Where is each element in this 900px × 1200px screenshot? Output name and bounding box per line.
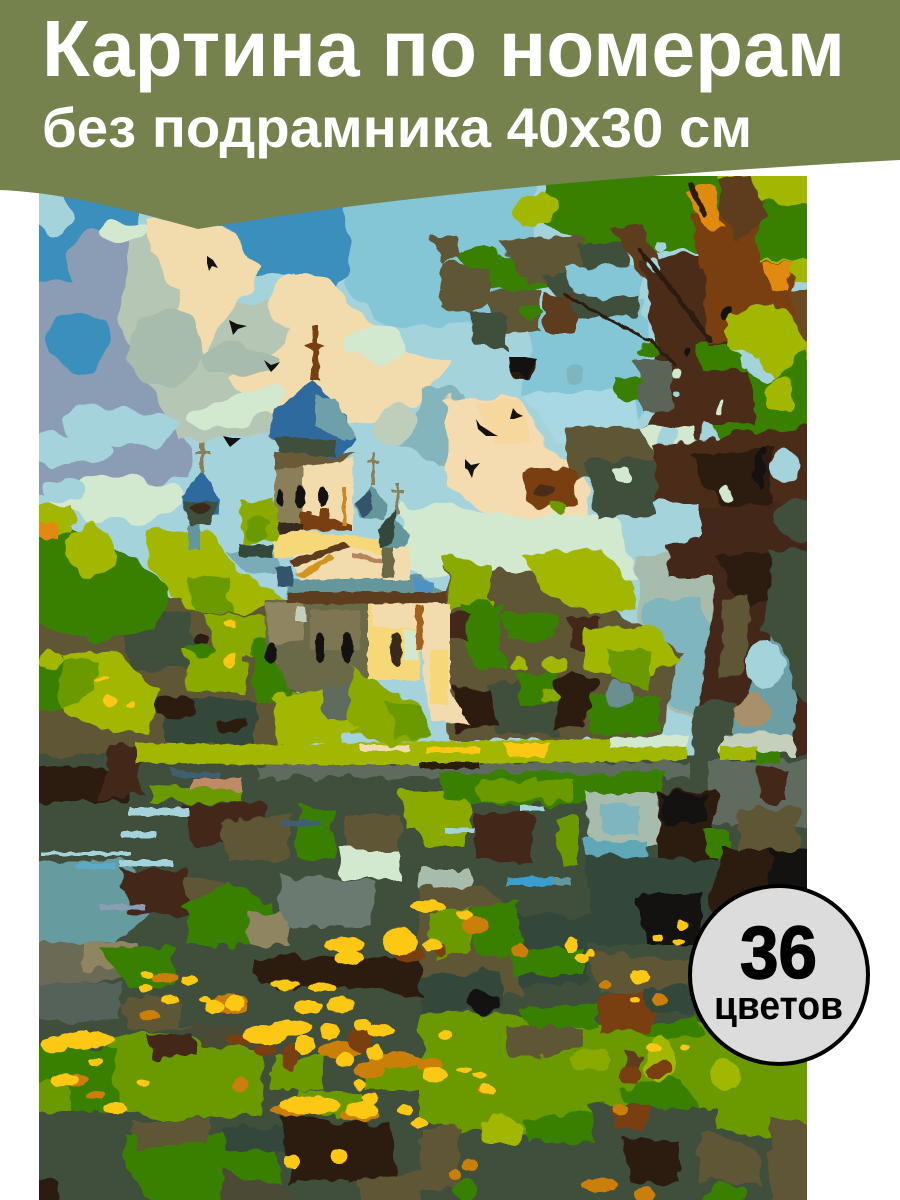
lawn strip behind the river [136, 735, 780, 769]
church [181, 325, 470, 725]
cross on main dome [305, 325, 324, 380]
drum and bands [274, 465, 304, 524]
badge label: цветов [714, 984, 843, 1028]
left small dome [181, 470, 220, 515]
windows [295, 486, 305, 508]
river and reflections [39, 742, 807, 950]
tree crown and branches [430, 170, 820, 578]
badge: number of colours [690, 886, 868, 1064]
header banner [0, 0, 900, 229]
orange and yellow flowers [41, 900, 690, 1200]
water highlights [40, 806, 571, 910]
tree trunk [691, 548, 807, 760]
foreground meadow [20, 885, 820, 1200]
badge number: 36 [740, 911, 817, 994]
bushes in front of the church [240, 497, 430, 745]
lower walls [264, 600, 369, 694]
dark branches [565, 185, 710, 365]
painting: church by the river [5, 160, 820, 1200]
subtitle: без подрамника 40х30 см [42, 96, 752, 159]
birds [207, 256, 537, 478]
right small domes [355, 485, 387, 520]
middle greenery left [39, 502, 342, 759]
sky with clouds [39, 185, 807, 756]
main dome [268, 380, 357, 460]
main roof [317, 555, 417, 590]
title: Картина по номерам [42, 4, 845, 93]
middle greenery right [440, 548, 680, 740]
